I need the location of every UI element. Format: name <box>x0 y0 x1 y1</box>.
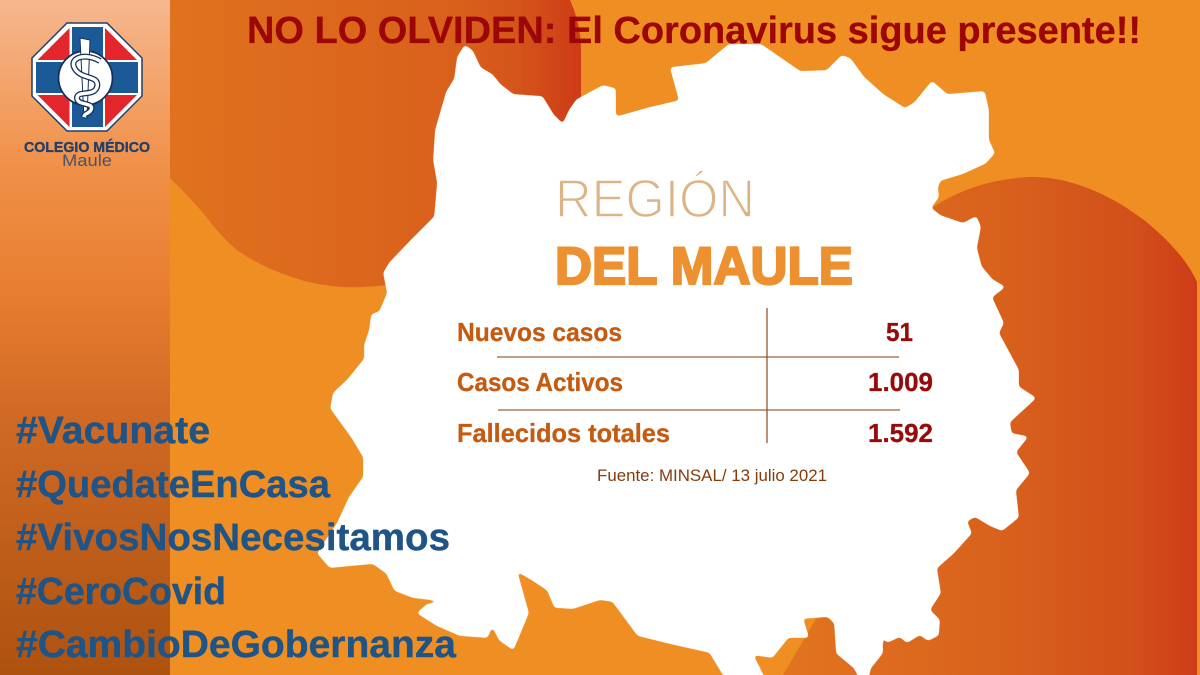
left sidebar panel <box>0 0 170 675</box>
logo subtitle: Maule <box>62 152 112 170</box>
map of the Maule region: white silhouette <box>318 45 1035 675</box>
heading: Del Maule: DEL MAULE <box>555 237 853 296</box>
row: fallecidos totales <box>457 418 933 448</box>
background blob: top left <box>170 0 581 300</box>
icon: octagon emblem <box>32 23 142 131</box>
row: casos activos: 1.009 <box>868 367 933 397</box>
hashtags: #QuedateEnCasa <box>16 464 331 506</box>
title: NO LO OLVIDEN: El Coronavirus sigue presente!! <box>247 10 1141 52</box>
logo: Colegio Médico Maule <box>24 23 150 170</box>
background blob: right and bottom <box>783 177 1197 675</box>
row: fallecidos totales: Fallecidos totales <box>457 418 670 448</box>
row: casos activos: Casos Activos <box>457 367 623 397</box>
hashtags: #Vacunate <box>16 410 210 452</box>
hashtags: #CambioDeGobernanza <box>16 624 457 666</box>
hashtags: #CeroCovid <box>16 571 226 613</box>
heading: Región: REGIÓN <box>555 169 755 229</box>
hashtags <box>16 410 457 666</box>
row: fallecidos totales: 1.592 <box>868 418 933 448</box>
source note: Fuente: MINSAL/ 13 julio 2021 <box>597 466 827 485</box>
row: nuevos casos: Nuevos casos <box>457 317 622 347</box>
row: nuevos casos: 51 <box>886 317 913 347</box>
row: casos activos <box>457 367 933 397</box>
row: nuevos casos <box>457 317 913 347</box>
hashtags: #VivosNosNecesitamos <box>16 517 450 559</box>
logo wordmark: COLEGIO MÉDICO <box>24 139 150 156</box>
data table <box>457 308 933 448</box>
